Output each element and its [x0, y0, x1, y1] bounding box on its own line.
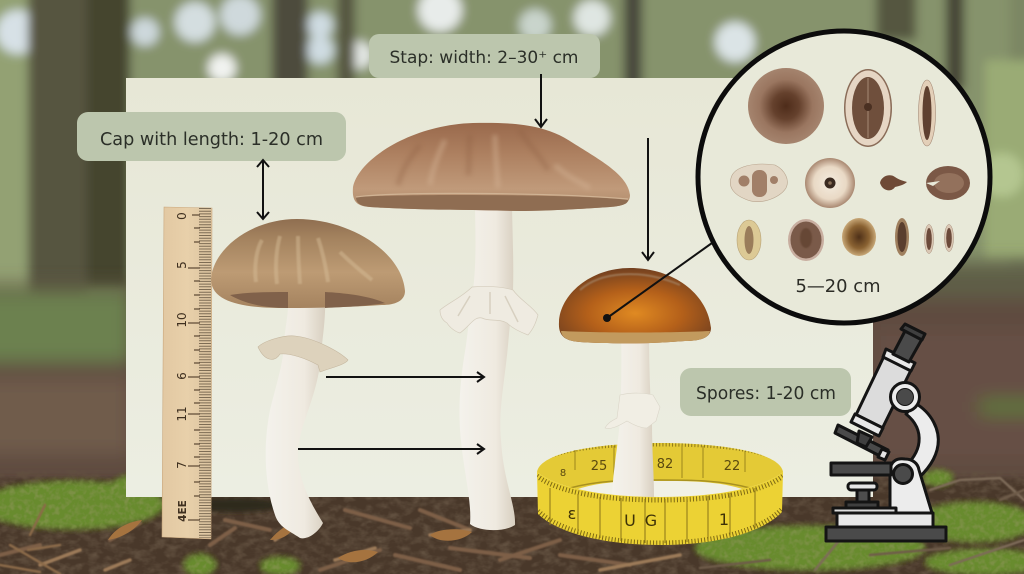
callout: stap width	[369, 34, 600, 78]
callout: cap length	[77, 112, 346, 161]
measuring tape: back band: 25	[591, 459, 607, 474]
arrow: stap to cap	[535, 74, 547, 127]
mushroom: center	[353, 123, 630, 530]
measuring tape: back band: 8	[560, 468, 566, 479]
arrow: to right cap	[642, 138, 654, 260]
measuring tape: front band	[537, 472, 783, 545]
measuring tape: back band: 82	[657, 457, 673, 472]
spore 6	[880, 175, 907, 190]
spore 8	[737, 220, 761, 260]
spore 7	[926, 166, 970, 200]
spore 3	[918, 80, 936, 146]
ruler numbers: 10	[175, 312, 189, 328]
ruler numbers: 11	[175, 406, 189, 422]
fallen leaves	[108, 520, 472, 562]
spore 12	[924, 224, 934, 254]
arm	[904, 403, 938, 482]
icon: microscope	[826, 324, 946, 541]
measuring tape: back band: 22	[724, 459, 740, 474]
ring	[605, 393, 660, 428]
ruler numbers: 5	[175, 261, 189, 269]
stem	[612, 335, 654, 497]
mushroom: left	[211, 219, 405, 538]
ring	[440, 286, 538, 335]
callout: spores	[680, 368, 851, 416]
measuring tape: front band: G	[645, 511, 657, 530]
magnifier size label: 5—20 cm	[796, 276, 880, 297]
cap	[559, 268, 711, 343]
ring	[258, 336, 348, 372]
tube	[855, 352, 914, 431]
spore 2	[844, 69, 892, 147]
forest floor litter	[0, 478, 1024, 574]
body base	[890, 459, 932, 513]
foot plate	[826, 527, 946, 541]
magnifier circle: spore shapes	[698, 31, 990, 323]
ruler numbers: 0	[175, 212, 189, 220]
callout: spores: Spores: 1-20 cm	[696, 384, 836, 404]
near ground	[0, 478, 1024, 574]
background panel	[126, 78, 873, 497]
stage	[831, 463, 891, 475]
focus stand	[846, 502, 878, 508]
ruler	[162, 207, 212, 539]
arrow: lower stem	[298, 444, 484, 454]
spore 5	[805, 158, 855, 208]
callout: cap length: Cap with length: 1-20 cm	[100, 129, 323, 150]
cap	[353, 123, 630, 211]
arrow: upper stem	[326, 372, 484, 382]
measuring tape: front band: U	[624, 511, 636, 530]
stem	[459, 198, 515, 530]
stem	[266, 295, 325, 538]
mushroom: right	[559, 268, 711, 497]
arrow: cap double-headed	[257, 160, 269, 219]
objective arm bar	[835, 425, 888, 458]
upper knob	[890, 382, 920, 412]
ruler numbers: 7	[175, 461, 189, 469]
lower knob	[894, 464, 912, 484]
ruler numbers: 4EE	[177, 500, 189, 522]
eyepiece	[893, 331, 922, 362]
ruler numbers: 6	[175, 372, 189, 380]
measuring tape: front band: ε	[568, 504, 576, 523]
spore 4	[730, 164, 787, 202]
callout: stap width: Stap: width: 2–30⁺ cm	[390, 48, 578, 68]
spore 9	[788, 219, 824, 261]
pointer: cap to magnifier	[603, 243, 712, 322]
spore 11	[895, 218, 909, 256]
measuring tape: back band	[537, 443, 783, 497]
measuring tape: front band: 1	[719, 510, 729, 529]
cap	[211, 219, 405, 308]
spore 10	[842, 218, 876, 256]
ruler numbers	[175, 212, 189, 522]
moss patches	[0, 470, 1024, 574]
spore 1	[748, 68, 824, 144]
spore 13	[944, 224, 954, 252]
